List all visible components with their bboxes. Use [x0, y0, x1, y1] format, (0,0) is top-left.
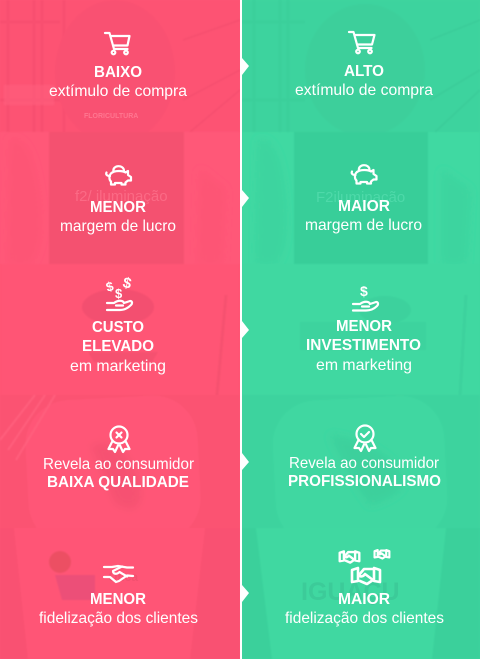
panel: left column background — [0, 0, 240, 659]
text: margem de lucro left: margem de lucro — [60, 218, 176, 235]
text: extímulo de compra left: extímulo de compra — [49, 83, 187, 100]
icon: three handshakes — [340, 550, 389, 584]
background text: floricultura: FLORICULTURA — [84, 113, 138, 120]
text: em marketing right: em marketing — [316, 357, 412, 374]
heading: BAIXA QUALIDADE: BAIXA QUALIDADE — [47, 474, 189, 491]
text: Revela ao consumidor right: Revela ao consumidor — [289, 455, 440, 472]
icon: piggy bank right — [352, 165, 376, 184]
icon: rosette with check — [354, 426, 376, 451]
heading: BAIXO: BAIXO — [94, 64, 142, 81]
text: margem de lucro right: margem de lucro — [305, 217, 422, 234]
heading: MAIOR fidelização: MAIOR — [338, 591, 390, 608]
heading: CUSTO: CUSTO — [92, 319, 144, 336]
arrow: row 3 — [242, 321, 249, 338]
divider — [240, 0, 242, 659]
text: fidelização left: fidelização dos clientes — [39, 610, 198, 627]
icon: hand with coins: $ — [115, 286, 123, 301]
icon: rosette with x — [108, 426, 130, 452]
heading: PROFISSIONALISMO: PROFISSIONALISMO — [288, 473, 441, 490]
text: em marketing left: em marketing — [70, 358, 166, 375]
icon: piggy bank left — [106, 166, 131, 184]
heading: INVESTIMENTO: INVESTIMENTO — [306, 337, 421, 354]
background text: iluminação right: F2iluminação — [316, 189, 405, 206]
icon: hand with one coin — [353, 283, 378, 310]
text: Revela ao consumidor left: Revela ao consumidor — [43, 456, 195, 473]
heading: MENOR fidelização: MENOR — [90, 591, 146, 608]
heading: ELEVADO: ELEVADO — [82, 338, 154, 355]
arrow: row 4 — [242, 453, 249, 470]
icon: hand with coins — [104, 274, 134, 310]
background text: ótica left: Ótica — [108, 569, 138, 584]
panel: right column background — [242, 0, 480, 659]
arrow: row 1 — [242, 58, 249, 75]
icon: cart right — [349, 32, 374, 53]
icon: hand with one coin: $ — [360, 283, 368, 299]
icon: hand with coins: $ — [121, 274, 134, 293]
background text: iguaçu: IGUAÇU — [301, 578, 400, 606]
heading: MENOR investimento: MENOR — [336, 318, 392, 335]
arrow: row 2 — [242, 190, 249, 207]
icon: cart left — [105, 33, 130, 54]
arrow: row 5 — [242, 585, 249, 602]
icon: handshake left — [104, 566, 133, 582]
text: extímulo de compra right: extímulo de compra — [295, 82, 433, 99]
icon: hand with coins: $ — [104, 278, 116, 295]
text: fidelização right: fidelização dos clientes — [285, 610, 444, 627]
heading: ALTO: ALTO — [344, 63, 384, 80]
heading: MENOR margem: MENOR — [90, 199, 146, 216]
background text: iluminação left: f2/ iluminação — [75, 188, 168, 205]
heading: MAIOR margem: MAIOR — [338, 198, 390, 215]
